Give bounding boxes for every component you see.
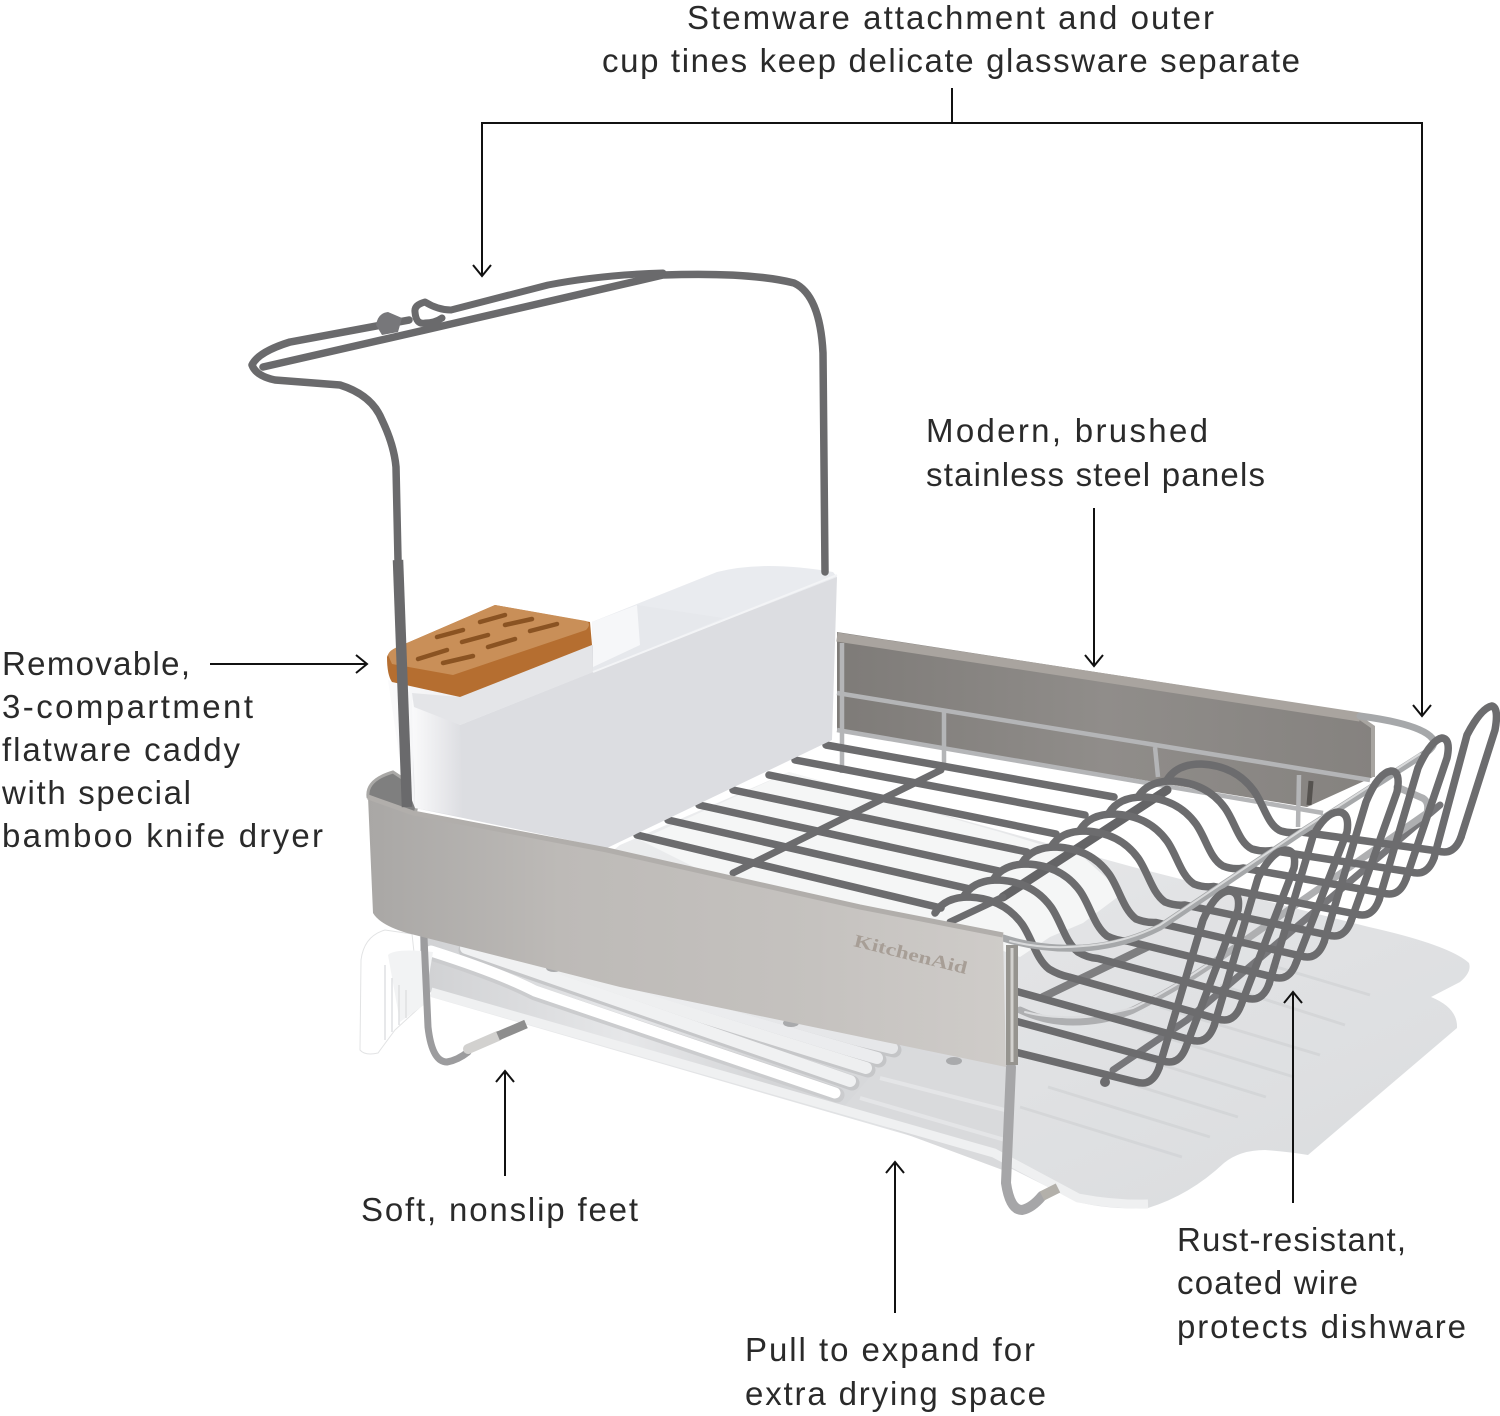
- product: expandable dish rack: [252, 273, 1496, 1210]
- callout: nonslip feet: [361, 1071, 638, 1228]
- callout text: [745, 1331, 1046, 1412]
- rack pegs: [546, 964, 962, 1065]
- callout text: cup tines keep delicate glassware separate: [602, 42, 1300, 79]
- callout text: Removable,: [2, 645, 190, 682]
- callout text: Rust-resistant,: [1177, 1221, 1406, 1258]
- callout: stainless panels: [926, 412, 1265, 666]
- wavy plate tines: [935, 764, 1461, 1083]
- callout text: protects dishware: [1177, 1308, 1466, 1345]
- callout text: stainless steel panels: [926, 456, 1265, 493]
- lower silver rim: [1020, 787, 1428, 1022]
- bracket arrows: [473, 88, 1431, 716]
- right rod of front panel: [1006, 945, 1018, 1065]
- rack floor wires: [637, 745, 1440, 1070]
- caddy white body: [388, 645, 593, 817]
- KitchenAid logo: KitchenAid: [852, 930, 969, 978]
- arrow: [496, 1071, 514, 1176]
- stemware wire handle: [252, 273, 825, 807]
- callout: flatware caddy: [1, 645, 367, 854]
- wire foot peg: [1100, 1077, 1110, 1087]
- rear stainless steel panel: [837, 632, 1373, 827]
- callout text: Modern, brushed: [926, 412, 1208, 449]
- upper silver rim: [1003, 716, 1434, 948]
- knife slots: [418, 615, 557, 663]
- back lip of front panel: [368, 772, 420, 815]
- drying tray: [431, 772, 1470, 1208]
- callout text: bamboo knife dryer: [2, 817, 323, 854]
- callout text: Pull to expand for: [745, 1331, 1035, 1368]
- callout: expand: [745, 1162, 1046, 1412]
- right leg with nonslip foot: [1006, 1067, 1058, 1210]
- arrow: [886, 1162, 904, 1313]
- expanded white slats and foot: [360, 930, 1148, 1204]
- caddy long face: [414, 577, 837, 848]
- callout: stemware attachment: [473, 0, 1431, 716]
- callout text: flatware caddy: [2, 731, 240, 768]
- callout text: [602, 0, 1300, 79]
- arrow: [1284, 992, 1302, 1203]
- arrow: [1085, 508, 1103, 666]
- callout text: with special: [1, 774, 191, 811]
- tall tine loops: [1159, 706, 1496, 1068]
- callout text: [1, 645, 323, 854]
- callout text: Soft, nonslip feet: [361, 1191, 638, 1228]
- left leg with nonslip foot: [424, 937, 526, 1062]
- callout text: coated wire: [1177, 1264, 1358, 1301]
- flatware caddy: [387, 566, 837, 848]
- slat rails: [431, 948, 894, 1095]
- white foot: [360, 930, 420, 1054]
- bamboo knife dryer: [387, 605, 592, 697]
- callout text: extra drying space: [745, 1375, 1046, 1412]
- caddy lid band: [412, 645, 593, 725]
- arrow: [210, 655, 367, 673]
- caddy interior: [592, 566, 837, 672]
- front stainless steel panel: [368, 797, 1006, 1067]
- callout text: [926, 412, 1265, 493]
- callout text: [1177, 1221, 1466, 1345]
- callout text: 3-compartment: [2, 688, 253, 725]
- callout text: Stemware attachment and outer: [687, 0, 1214, 36]
- callout: coated wire: [1177, 992, 1466, 1345]
